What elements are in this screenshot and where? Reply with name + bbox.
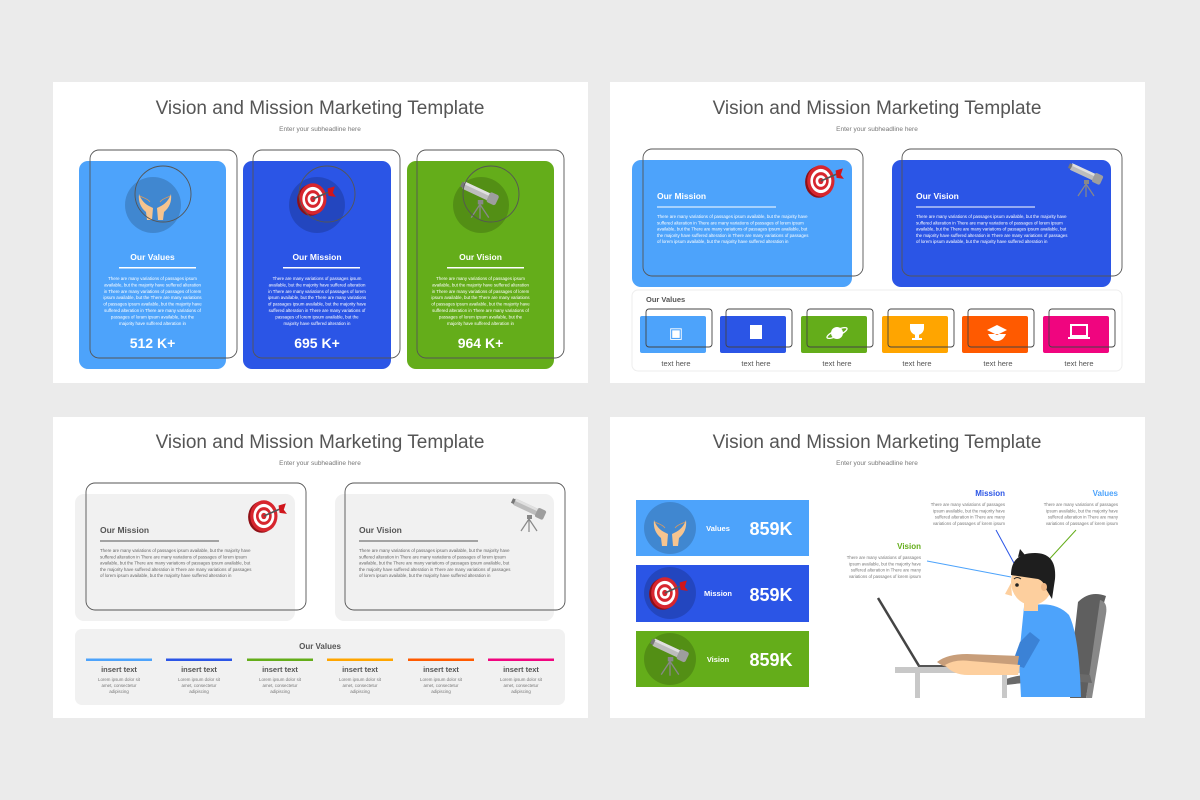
panel: our values list: adipiscing bbox=[431, 689, 451, 694]
card: mission: suffered alteration in There are many variations of bbox=[269, 308, 366, 313]
panel: our values list: insert text bbox=[181, 665, 217, 674]
card: values: Our Values bbox=[130, 252, 175, 262]
stat bar: mission bbox=[636, 565, 809, 622]
card: vision: suffered alteration in There are many variations of passages of lorem ipsum bbox=[359, 554, 506, 559]
card: vision: in There are many variations of passages of lorem bbox=[432, 289, 530, 294]
card: vision: available, but the majority have suffered alteration bbox=[432, 282, 529, 287]
panel: our values icons: text here bbox=[661, 359, 691, 368]
card: values: There are many variations of passages ipsum bbox=[108, 276, 197, 281]
stat bar: mission: Mission bbox=[704, 589, 732, 598]
card: vision: of passages ipsum available, but the majority have bbox=[431, 302, 530, 307]
panel: our values list: Lorem ipsum dolor sit bbox=[259, 677, 302, 682]
panel: our values icons: text here bbox=[1064, 359, 1094, 368]
panel: our values icons: text here bbox=[902, 359, 932, 368]
card: mission: of passages ipsum available, but the majority have bbox=[268, 302, 367, 307]
card: vision: There are many variations of passages ipsum available, but the majority have bbox=[359, 548, 510, 553]
title: Vision and Mission Marketing Template bbox=[713, 432, 1041, 453]
stat bar: values: Values bbox=[706, 524, 730, 533]
card: mission: There are many variations of passages ipsum bbox=[273, 276, 362, 281]
panel: our values list bbox=[75, 629, 565, 705]
callout: mission: ipsum available, but the majority have bbox=[933, 508, 1006, 513]
panel: our values list: adipiscing bbox=[511, 689, 531, 694]
panel: our values icons bbox=[632, 290, 1122, 371]
card: mission: suffered alteration in There are many variations of passages of lorem ipsum bbox=[100, 554, 247, 559]
title: Vision and Mission Marketing Template bbox=[713, 98, 1041, 119]
card: values: available, but the majority have suffered alteration bbox=[104, 282, 201, 287]
stat bar: vision: 859K bbox=[749, 650, 793, 670]
card: vision: suffered alteration in There are many variations of passages of lorem ipsum bbox=[916, 220, 1063, 225]
panel: our values icons: text here bbox=[741, 359, 771, 368]
card: mission bbox=[632, 149, 863, 287]
card: mission: Our Mission bbox=[657, 191, 706, 201]
card: vision: the majority have suffered alteration in There are many variations of passages bbox=[359, 567, 511, 572]
callout: vision: variations of passages of lorem ipsum bbox=[849, 574, 921, 579]
card: mission: available, but the There are many variations of passages ipsum available, but bbox=[100, 561, 251, 566]
card: mission: ipsum available, but the There are many variations bbox=[268, 295, 367, 300]
callout: mission: There are many variations of passages bbox=[931, 502, 1005, 507]
title: Vision and Mission Marketing Template bbox=[156, 98, 484, 119]
card: mission: 695 K+ bbox=[294, 335, 340, 351]
card: mission: available, but the There are many variations of passages ipsum available, but bbox=[657, 227, 808, 232]
panel: our values icons: text here bbox=[822, 359, 852, 368]
panel: our values list: amet, consectetur bbox=[102, 683, 137, 688]
card: vision: available, but the There are many variations of passages ipsum available, but bbox=[916, 227, 1067, 232]
subtitle: Enter your subheadline here bbox=[836, 460, 918, 467]
card: vision bbox=[892, 149, 1122, 287]
card: vision bbox=[335, 483, 565, 621]
illustration: person at laptop bbox=[878, 549, 1106, 698]
card: values: majority have suffered alteration in bbox=[119, 321, 187, 326]
stat bar: mission: 859K bbox=[749, 585, 793, 605]
card: mission: Our Mission bbox=[292, 252, 342, 262]
panel: our values list: adipiscing bbox=[270, 689, 290, 694]
card: values: in There are many variations of passages of lorem bbox=[104, 289, 202, 294]
card: mission: Our Mission bbox=[100, 525, 149, 535]
card: mission: the majority have suffered alteration in There are many variations of passages bbox=[100, 567, 252, 572]
card: vision: ipsum available, but the There are many variations bbox=[431, 295, 530, 300]
card: values: of passages ipsum available, but the majority have bbox=[103, 302, 202, 307]
panel: our values list: Lorem ipsum dolor sit bbox=[98, 677, 141, 682]
stat bar: values bbox=[636, 500, 809, 556]
card: mission bbox=[75, 483, 306, 621]
panel: our values list: insert text bbox=[101, 665, 137, 674]
card: vision: Our Vision bbox=[459, 252, 502, 262]
card: vision: There are many variations of passages ipsum bbox=[436, 276, 525, 281]
card: mission: passages of lorem ipsum available, but the bbox=[275, 314, 359, 319]
panel: our values list: Lorem ipsum dolor sit bbox=[178, 677, 221, 682]
card: vision: majority have suffered alteration in bbox=[447, 321, 515, 326]
card: vision: Our Vision bbox=[359, 525, 402, 535]
card: vision: available, but the There are many variations of passages ipsum available, but bbox=[359, 561, 510, 566]
card: mission: available, but the majority have suffered alteration bbox=[269, 282, 366, 287]
card: vision: 964 K+ bbox=[458, 335, 503, 351]
card: vision bbox=[407, 150, 564, 369]
panel: our values list: adipiscing bbox=[350, 689, 370, 694]
stat bar: vision bbox=[636, 631, 809, 687]
card: vision: suffered alteration in There are many variations of bbox=[432, 308, 530, 313]
panel: our values list: Lorem ipsum dolor sit bbox=[420, 677, 463, 682]
callout: vision: There are many variations of passages bbox=[847, 555, 921, 560]
connector lines bbox=[927, 530, 1076, 577]
panel: our values list: amet, consectetur bbox=[182, 683, 217, 688]
callout: mission: suffered alteration in There are many bbox=[935, 515, 1006, 520]
panel: our values list: insert text bbox=[423, 665, 459, 674]
card: vision: There are many variations of passages ipsum available, but the majority have bbox=[916, 214, 1067, 219]
callout: vision: Vision bbox=[897, 542, 921, 551]
card: mission: of lorem ipsum available, but the majority have suffered alteration in bbox=[657, 239, 789, 244]
callout: values: Values bbox=[1093, 489, 1119, 498]
slide 2: mission/vision with value icons bbox=[610, 82, 1145, 383]
subtitle: Enter your subheadline here bbox=[836, 126, 918, 133]
callout: values: ipsum available, but the majority have bbox=[1046, 508, 1119, 513]
card: vision: of lorem ipsum available, but the majority have suffered alteration in bbox=[359, 573, 491, 578]
panel: our values list: insert text bbox=[503, 665, 539, 674]
card: vision: of lorem ipsum available, but the majority have suffered alteration in bbox=[916, 239, 1048, 244]
card: mission: the majority have suffered alteration in There are many variations of passages bbox=[657, 233, 809, 238]
panel: our values list: amet, consectetur bbox=[263, 683, 298, 688]
card: mission: There are many variations of passages ipsum available, but the majority have bbox=[657, 214, 808, 219]
card: mission bbox=[243, 150, 400, 369]
card: mission: majority have suffered alteration in bbox=[283, 321, 351, 326]
title: Vision and Mission Marketing Template bbox=[156, 432, 484, 453]
card: values: ipsum available, but the There are many variations bbox=[103, 295, 202, 300]
subtitle: Enter your subheadline here bbox=[279, 460, 361, 467]
card: vision: the majority have suffered alteration in There are many variations of passages bbox=[916, 233, 1068, 238]
panel: our values list: adipiscing bbox=[109, 689, 129, 694]
callout: values bbox=[1044, 489, 1119, 526]
panel: our values list: insert text bbox=[342, 665, 378, 674]
slide 4: stat bars and person illustration bbox=[610, 417, 1145, 718]
card: mission: There are many variations of passages ipsum available, but the majority have bbox=[100, 548, 251, 553]
slide 1: three cards bbox=[53, 82, 588, 383]
panel: our values icons: text here bbox=[983, 359, 1013, 368]
panel: our values icons: Our Values bbox=[646, 295, 685, 304]
callout: mission: variations of passages of lorem ipsum bbox=[933, 521, 1005, 526]
panel: our values list: insert text bbox=[262, 665, 298, 674]
callout: values: suffered alteration in There are many bbox=[1048, 515, 1119, 520]
stat bar: values: 859K bbox=[749, 519, 793, 539]
callout: mission: Mission bbox=[975, 489, 1005, 498]
panel: our values icons: ▣ bbox=[669, 325, 683, 342]
card: values: passages of loram ipsum available, but the bbox=[111, 314, 195, 319]
panel: our values list: amet, consectetur bbox=[504, 683, 539, 688]
callout: vision: ipsum available, but the majority have bbox=[849, 561, 922, 566]
card: values: 512 K+ bbox=[130, 335, 175, 351]
panel: our values list: amet, consectetur bbox=[343, 683, 378, 688]
card: values: suffered alteration in There are many variations of bbox=[104, 308, 202, 313]
panel: our values list: adipiscing bbox=[189, 689, 209, 694]
slide 3: gray cards with values list bbox=[53, 417, 588, 718]
panel: our values list: Lorem ipsum dolor sit bbox=[500, 677, 543, 682]
callout: vision: suffered alteration in There are many bbox=[851, 568, 922, 573]
card: mission: suffered alteration in There are many variations of passages of lorem ipsum bbox=[657, 220, 804, 225]
callout: values: variations of passages of lorem ipsum bbox=[1046, 521, 1118, 526]
card: values bbox=[79, 150, 237, 369]
subtitle: Enter your subheadline here bbox=[279, 126, 361, 133]
panel: our values list: amet, consectetur bbox=[424, 683, 459, 688]
callout: mission bbox=[931, 489, 1006, 526]
card: mission: of lorem ipsum available, but the majority have suffered alteration in bbox=[100, 573, 232, 578]
card: vision: Our Vision bbox=[916, 191, 959, 201]
panel: our values list: Lorem ipsum dolor sit bbox=[339, 677, 382, 682]
card: mission: in There are many variations of passages of lorem bbox=[268, 289, 366, 294]
callout: values: There are many variations of passages bbox=[1044, 502, 1118, 507]
card: vision: passages of lorem ipsum available, but the bbox=[439, 314, 523, 319]
panel: our values list: Our Values bbox=[299, 642, 341, 651]
stat bar: vision: Vision bbox=[707, 655, 730, 664]
callout: vision bbox=[847, 542, 922, 579]
